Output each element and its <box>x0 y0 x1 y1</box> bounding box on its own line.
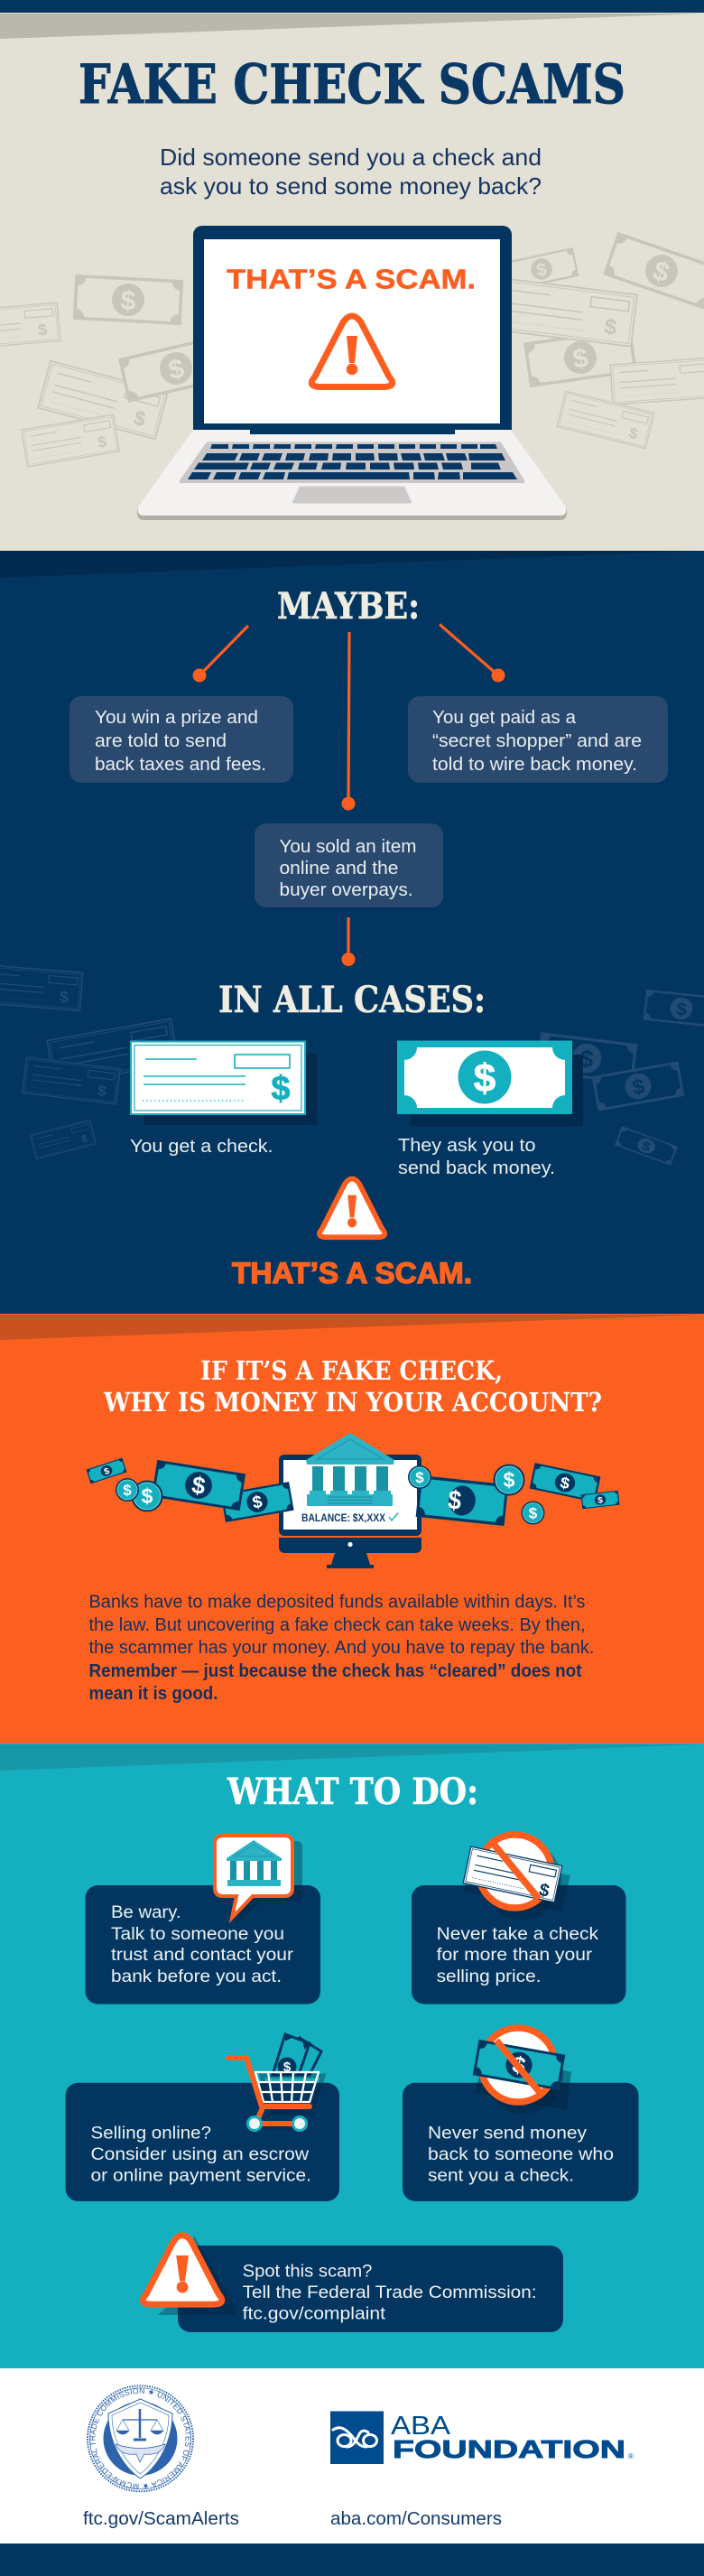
panel: be wary <box>85 1885 320 2004</box>
caption: they ask you to send back money: send back money. <box>398 1158 555 1178</box>
panel: never take a check: Never take a check <box>437 1925 599 1944</box>
decorative bills and checks, navy section: $ <box>630 1074 646 1100</box>
laptop screen text: that's a scam: THAT’S A SCAM. <box>227 264 476 294</box>
icon: speech bubble with bank <box>215 1836 302 1923</box>
panel: selling online: or online payment service. <box>90 2167 311 2186</box>
logo: FTC seal: FEDERAL TRADE COMMISSION ★ UNITED STATES OF AMERICA ★ MCMXV ★ <box>90 2388 191 2488</box>
logo: ABA Foundation: ® <box>628 2452 634 2460</box>
logo: FTC seal <box>87 2385 194 2492</box>
callout: that's a scam: THAT’S A SCAM. <box>232 1257 472 1289</box>
panel: prize: You win a prize and <box>95 708 258 728</box>
panel: secret shopper <box>408 696 668 783</box>
illustration: flying money: $ <box>597 1495 604 1506</box>
illustration: monitor with bank <box>279 1433 421 1568</box>
decorative bills and checks behind laptop: $ <box>627 424 640 443</box>
decorative bills and checks behind laptop: $ <box>165 353 187 386</box>
icon: shopping cart with money: $ <box>283 2060 292 2075</box>
panel: prize <box>69 696 293 783</box>
illustration: flying money: $ <box>190 1471 208 1500</box>
caption: you get a check: You get a check. <box>130 1137 273 1157</box>
decorative bills and checks, navy section: $ <box>97 1082 107 1100</box>
section background: maybe <box>0 551 704 1314</box>
subtitle <box>160 144 542 200</box>
heading: what to do: WHAT TO DO: <box>227 1771 478 1813</box>
decorative bills and checks behind laptop: $ <box>571 343 590 375</box>
illustration: flying money: $ <box>559 1474 571 1493</box>
laptop illustration <box>137 226 567 520</box>
panel: be wary: Be wary. <box>111 1903 181 1922</box>
panel: selling online: Consider using an escrow <box>90 2145 309 2164</box>
connector lines <box>199 625 498 959</box>
icon: warning triangle on screen <box>311 316 393 386</box>
panel: prize: back taxes and fees. <box>95 755 266 775</box>
panel: sold item <box>255 823 443 907</box>
icon: check card <box>130 1040 317 1125</box>
subtitle: Did someone send you a check and <box>160 144 542 171</box>
decorative bills and checks behind laptop: $ <box>97 432 108 451</box>
icon: shopping cart with money <box>228 2034 323 2131</box>
decorative bills and checks, navy section <box>0 965 704 1166</box>
logo: ABA Foundation: ABA <box>391 2412 451 2441</box>
panel: be wary: Talk to someone you <box>111 1925 284 1944</box>
decorative bills and checks behind laptop: $ <box>535 259 549 281</box>
decorative bills and checks behind laptop: $ <box>603 315 618 340</box>
icon: no check sign <box>463 1835 570 1920</box>
section background: what to do <box>0 1744 704 2368</box>
text block: bank explanation: the law. But uncovering a fake check can take weeks. By then, <box>88 1615 585 1635</box>
illustration: flying money: $ <box>142 1484 153 1508</box>
heading: why is money in your account <box>103 1355 602 1418</box>
caption: they ask you to send back money: They ask you to <box>398 1136 536 1156</box>
panel: never send money: Never send money <box>428 2124 588 2144</box>
logo: ABA Foundation <box>330 2411 634 2464</box>
text block: bank explanation: mean it is good. <box>88 1684 218 1704</box>
heading: in all cases: IN ALL CASES: <box>218 979 486 1021</box>
icon: no check sign: $ <box>537 1880 551 1902</box>
panel: never send money: sent you a check. <box>428 2167 574 2186</box>
panel: spot this scam: Spot this scam? <box>243 2263 372 2281</box>
logo: ABA Foundation: FOUNDATION <box>393 2435 625 2463</box>
panel: secret shopper: You get paid as a <box>432 708 577 728</box>
panel: secret shopper: told to wire back money. <box>432 755 637 775</box>
text block: bank explanation: the scammer has your money. And you have to repay the bank. <box>88 1638 594 1658</box>
text block: bank explanation: Remember — just because the check has “cleared” does not <box>88 1661 582 1681</box>
panel: sold item: online and the <box>280 859 399 879</box>
icon: no money sign: $ <box>510 2052 527 2079</box>
decorative bills and checks, navy section: $ <box>579 1045 595 1074</box>
footer link: aba: aba.com/Consumers <box>330 2509 502 2529</box>
panel: prize: are told to send <box>95 731 227 751</box>
text block: bank explanation: Banks have to make deposited funds available within days. It’s <box>88 1593 585 1613</box>
decorative bills and checks, navy section: $ <box>675 1000 688 1020</box>
heading: why is money in your account: WHY IS MONEY IN YOUR ACCOUNT? <box>103 1387 602 1418</box>
text block: bank explanation <box>88 1593 594 1704</box>
icon: warning triangle with shadow <box>143 2236 236 2315</box>
icon: check card: $ <box>271 1070 291 1108</box>
decorative bills and checks behind laptop: $ <box>120 286 136 316</box>
icon: money bill card: $ <box>474 1056 496 1101</box>
decorative bills and checks behind laptop: $ <box>132 406 149 431</box>
panel: sold item: buyer overpays. <box>280 880 413 900</box>
panel: sold item: You sold an item <box>280 837 417 857</box>
panel: selling online: Selling online? <box>90 2124 211 2144</box>
panel: never send money <box>403 2083 639 2201</box>
section background: fake check explainer <box>0 1314 704 1744</box>
footer background <box>0 2368 704 2576</box>
illustration: flying money: $ <box>447 1484 463 1515</box>
panel: never take a check <box>412 1885 626 2004</box>
icon: money bill card <box>397 1040 583 1126</box>
panel: spot this scam: ftc.gov/complaint <box>243 2305 386 2324</box>
illustration: flying money <box>86 1458 619 1526</box>
decorative bills and checks behind laptop: $ <box>37 321 48 339</box>
panel: spot this scam: Tell the Federal Trade Commission: <box>243 2283 536 2302</box>
illustration: flying money: $ <box>251 1493 264 1513</box>
illustration: monitor with bank: BALANCE: $X,XXX <box>301 1511 385 1524</box>
illustration: flying money: $ <box>103 1466 111 1477</box>
heading: why is money in your account: IF IT’S A FAKE CHECK, <box>200 1355 503 1386</box>
illustration: flying money: $ <box>123 1482 132 1499</box>
panel: secret shopper: “secret shopper” and are <box>432 731 642 751</box>
connector dots <box>193 668 505 966</box>
panel: be wary: trust and contact your <box>111 1946 294 1965</box>
heading: maybe: MAYBE: <box>277 585 420 628</box>
illustration: flying money: $ <box>529 1504 538 1522</box>
decorative bills and checks, navy section: $ <box>59 988 69 1006</box>
icon: no money sign <box>473 2028 571 2114</box>
decorative bills and checks behind laptop: $ <box>649 256 673 289</box>
decorative bills and checks behind laptop <box>0 232 704 467</box>
decorative bills and checks, navy section: $ <box>640 1139 653 1155</box>
footer link: ftc: ftc.gov/ScamAlerts <box>83 2509 239 2529</box>
illustration: flying money: $ <box>504 1468 515 1492</box>
caption: they ask you to send back money <box>398 1136 555 1178</box>
panel: never send money: back to someone who <box>428 2145 614 2164</box>
panel: never take a check: for more than your <box>437 1946 593 1965</box>
panel: be wary: bank before you act. <box>111 1967 282 1986</box>
panel: spot this scam <box>178 2246 563 2332</box>
panel: never take a check: selling price. <box>437 1967 542 1986</box>
illustration: flying money: $ <box>415 1469 424 1486</box>
panel: selling online <box>66 2083 339 2201</box>
icon: warning triangle <box>320 1178 384 1237</box>
decorative bills and checks, navy section: $ <box>80 1133 89 1145</box>
section background: intro <box>0 0 704 552</box>
subtitle: ask you to send some money back? <box>160 172 542 200</box>
